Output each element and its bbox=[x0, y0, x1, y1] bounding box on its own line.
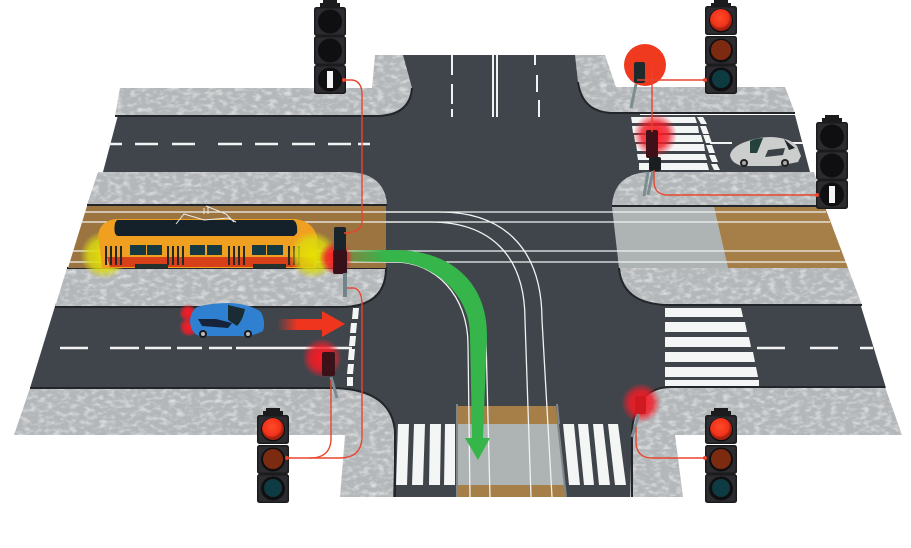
traffic light: right bbox=[815, 115, 848, 209]
road markings: west lower lane bbox=[60, 347, 352, 349]
tram bed west bbox=[68, 206, 386, 268]
kerb edges bbox=[30, 82, 885, 497]
road markings: east upper lane bbox=[710, 142, 803, 144]
signal: north-east pedestrian with solid red disc bbox=[624, 44, 666, 108]
tram roof windows bbox=[114, 220, 297, 236]
signal: tram west bbox=[319, 227, 353, 297]
roads bbox=[30, 55, 886, 497]
tram bed east bbox=[714, 207, 848, 268]
tram side windows bbox=[130, 245, 283, 255]
signal: west pedestrian bbox=[302, 338, 342, 398]
traffic light: top right bbox=[703, 0, 737, 94]
signal: south-east corner bbox=[621, 383, 661, 437]
connector lines bbox=[288, 70, 816, 458]
sidewalk: south-west bbox=[14, 388, 395, 497]
silver car bbox=[730, 137, 801, 167]
tram skirt bbox=[135, 264, 286, 268]
crosswalk: south-east bbox=[563, 424, 626, 485]
traffic light: bottom right bbox=[703, 408, 737, 503]
sidewalk: tram island east, upper bbox=[612, 172, 824, 206]
tram body bbox=[98, 219, 317, 268]
tram lower band bbox=[107, 257, 314, 267]
road markings: west upper lane bbox=[108, 143, 370, 145]
road markings: east lower lane bbox=[757, 347, 873, 349]
crosswalk: north-east bbox=[631, 117, 720, 170]
central tram platform bbox=[457, 404, 566, 497]
sidewalk: tram island west, upper bbox=[87, 172, 387, 205]
sidewalk: tram island west, lower bbox=[55, 268, 386, 307]
crosswalk: east bbox=[665, 308, 759, 386]
turn arrow: green bbox=[350, 250, 490, 460]
tram crossing platform east bbox=[612, 207, 728, 268]
sidewalk: north-west bbox=[115, 55, 412, 116]
tram bbox=[80, 206, 337, 279]
tram doors bbox=[105, 246, 300, 265]
tram glow: front bbox=[289, 231, 337, 279]
crosswalk: west stop line bbox=[347, 308, 359, 386]
sidewalk: north-east bbox=[575, 55, 795, 113]
blue car bbox=[179, 303, 264, 338]
sidewalk: tram island east, lower bbox=[619, 268, 862, 305]
road markings: north approach bbox=[451, 55, 540, 117]
sidewalk: south-east bbox=[630, 387, 902, 497]
traffic light: bottom left bbox=[257, 408, 289, 503]
tram tracks bbox=[68, 212, 846, 497]
tram pantograph bbox=[176, 206, 236, 224]
signal: north-east pair bbox=[633, 113, 677, 196]
traffic arrow: red bbox=[277, 311, 345, 337]
traffic light: top left bbox=[314, 0, 346, 94]
crosswalk: south-west bbox=[396, 424, 455, 485]
tram glow: rear bbox=[80, 231, 128, 279]
